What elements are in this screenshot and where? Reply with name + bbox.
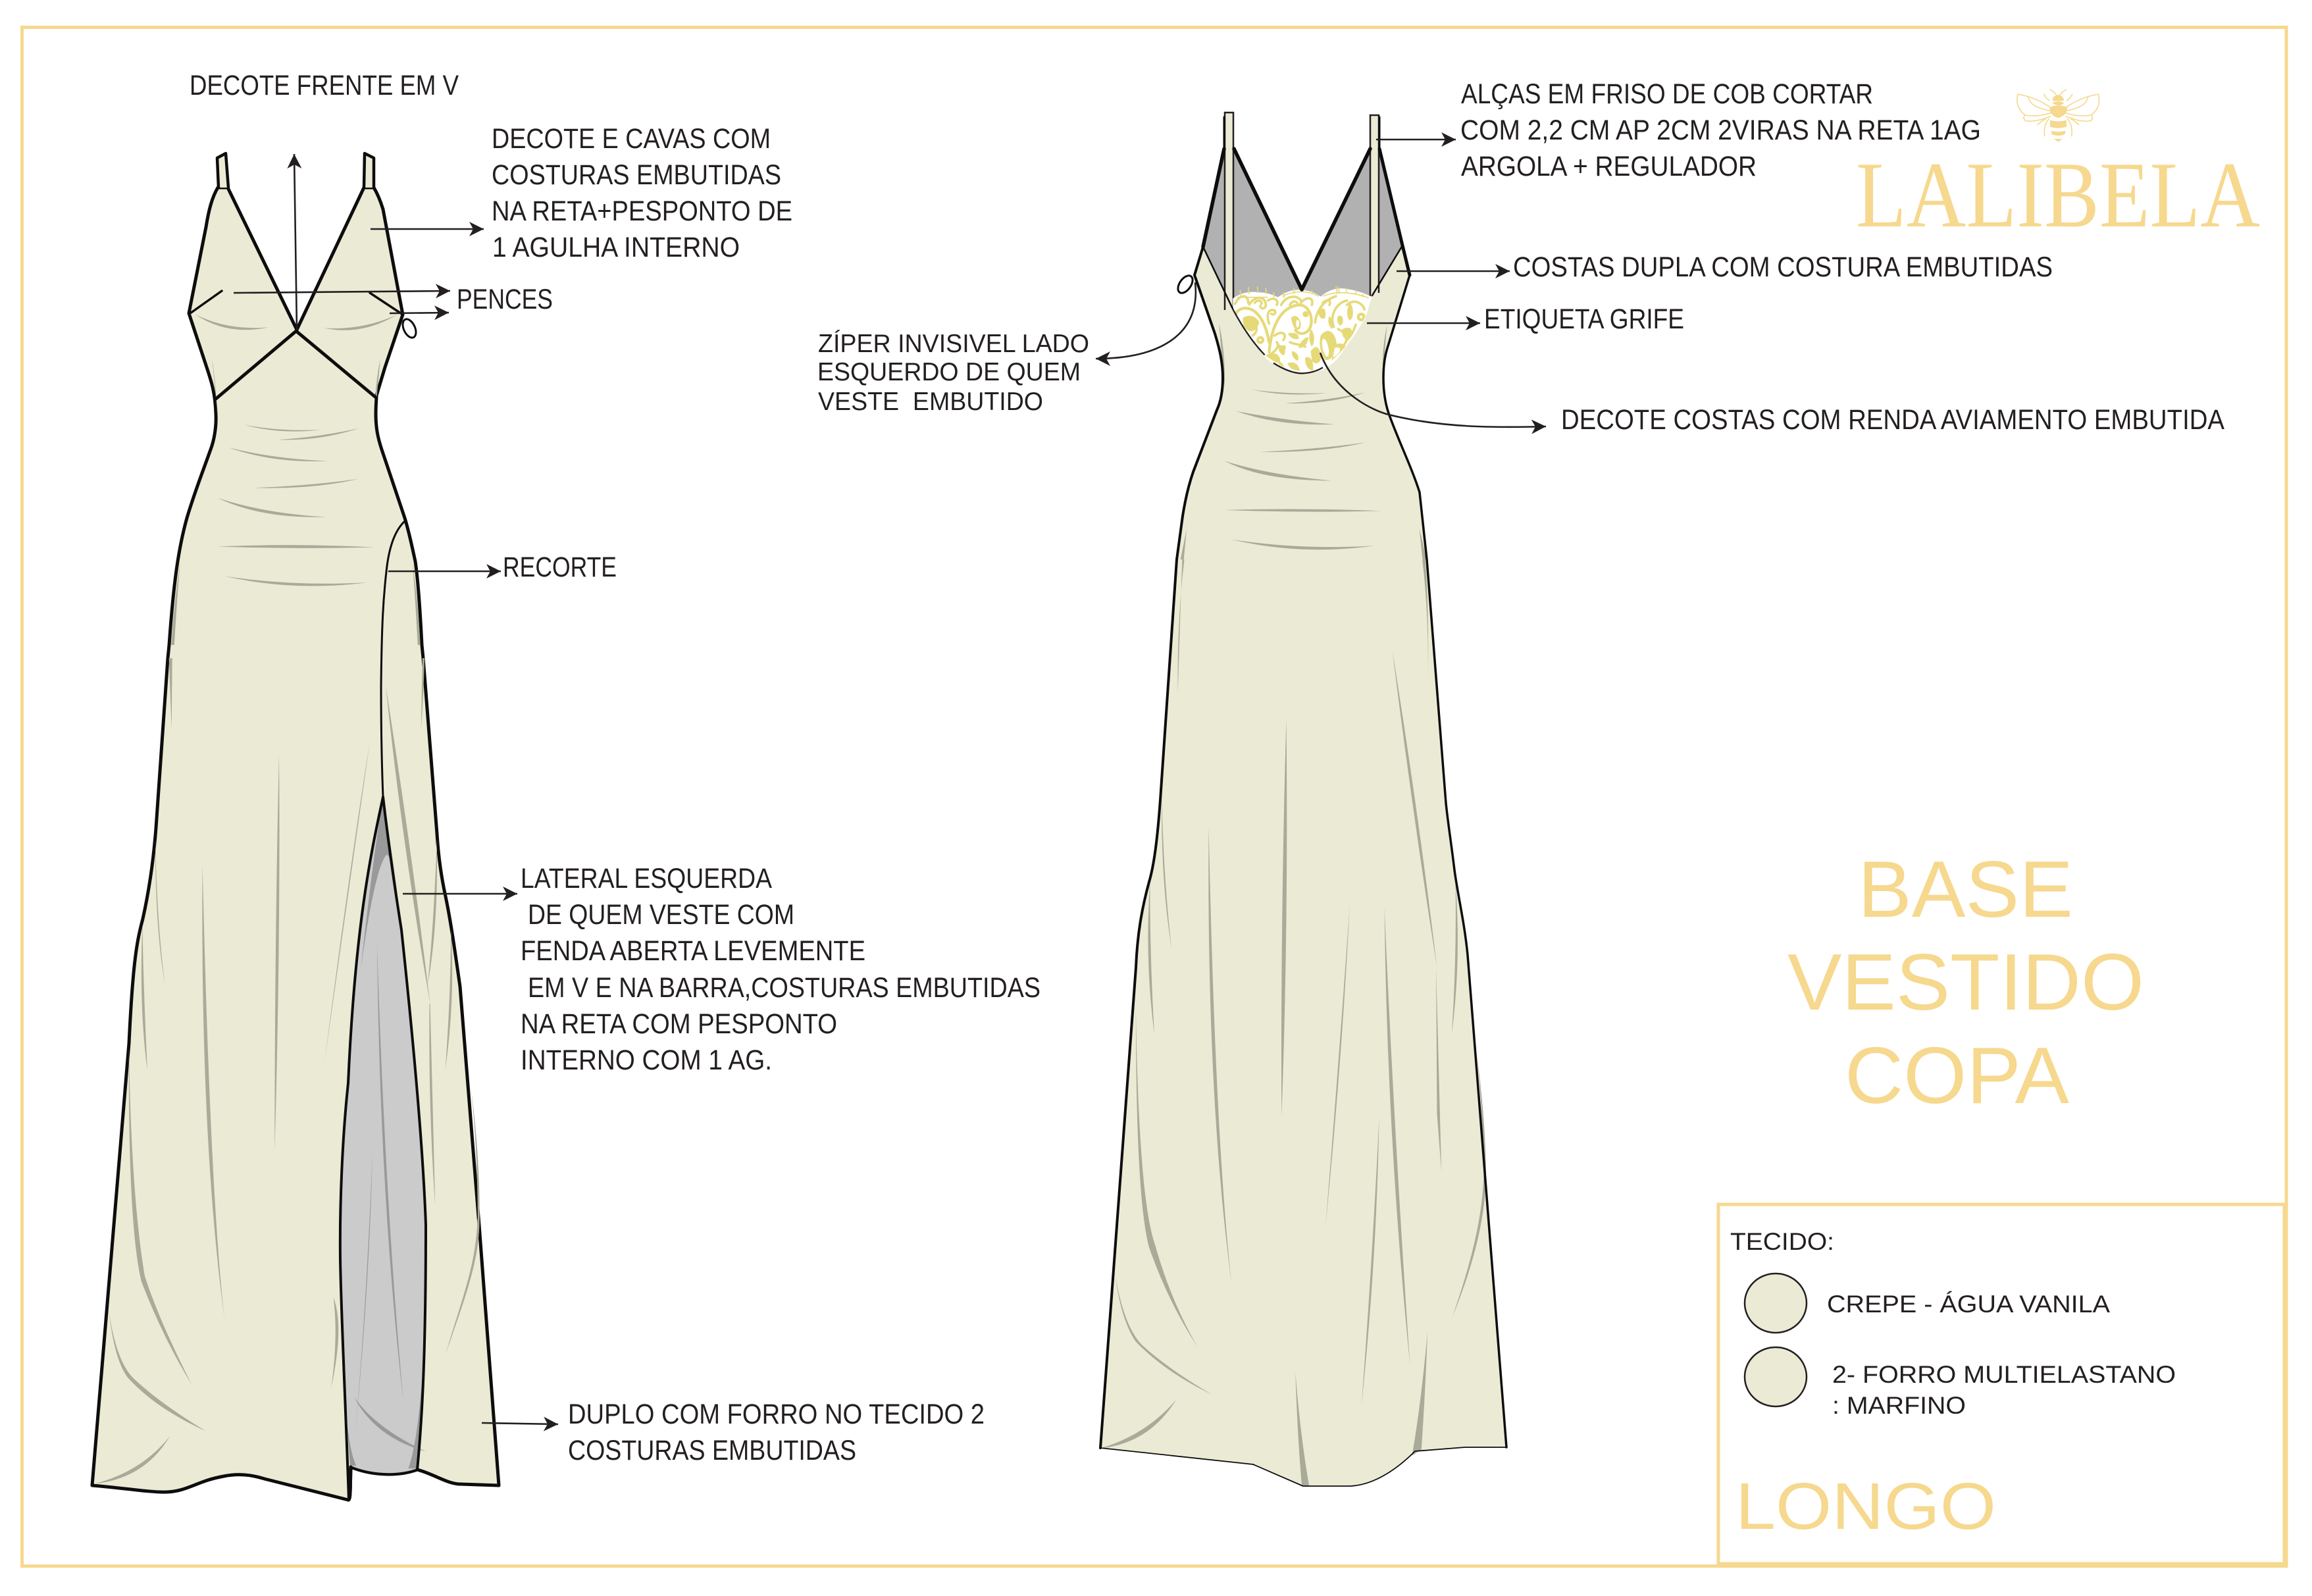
arrow costas [1397, 270, 1510, 272]
annotation: alcas: COM 2,2 CM AP 2CM 2VIRAS NA RETA 1AG [1460, 115, 1981, 146]
folds in slit lining [343, 797, 426, 1468]
arrow cavas [371, 228, 484, 230]
annotation: duplo com forro: DUPLO COM FORRO NO TECIDO 2 [568, 1399, 985, 1430]
panel: tecido [1718, 1204, 2284, 1564]
annotation: recorte: RECORTE [503, 552, 617, 583]
annotation: decote e cavas: COSTURAS EMBUTIDAS [492, 159, 781, 191]
swatch 2 label [1832, 1361, 2176, 1419]
annotation: decote e cavas [492, 123, 792, 263]
annotation: decote frente: DECOTE FRENTE EM V [190, 70, 459, 101]
annotation: duplo com forro: COSTURAS EMBUTIDAS [568, 1435, 856, 1466]
annotation: lateral esquerda: EM V E NA BARRA,COSTURAS EMBUTIDAS [528, 972, 1040, 1004]
arrow decote costas [1320, 353, 1546, 427]
tecido heading: TECIDO: [1730, 1228, 1834, 1255]
lace lower edge [1233, 309, 1323, 373]
arrow duplo [482, 1423, 558, 1424]
title: BASE [1858, 844, 2073, 934]
annotation: decote costas: DECOTE COSTAS COM RENDA AVIAMENTO EMBUTIDA [1561, 404, 2224, 436]
arrow decote [294, 154, 297, 330]
straps back [1225, 113, 1379, 310]
lace background [1233, 288, 1372, 373]
arrows [234, 140, 1546, 1424]
annotation: decote e cavas: DECOTE E CAVAS COM [492, 123, 771, 155]
dress silhouette front [92, 188, 499, 1500]
logo icon: bee [2017, 90, 2099, 142]
arrow pences 1 [234, 291, 450, 293]
annotation: ziper: ESQUERDO DE QUEM [817, 358, 1081, 386]
lace pattern [1233, 296, 1366, 371]
ring back [1175, 273, 1196, 296]
longo label: LONGO [1735, 1470, 1996, 1543]
annotation: lateral esquerda: FENDA ABERTA LEVEMENTE [521, 935, 865, 967]
dress silhouette back [1100, 245, 1506, 1486]
panel border [1718, 1204, 2284, 1564]
logo wordmark: LALIBELA [1856, 143, 2260, 247]
recorte seam [381, 521, 405, 797]
arrow alcas [1376, 139, 1456, 140]
annotation: pences: PENCES [457, 284, 553, 315]
title [1787, 844, 2144, 1120]
annotation: duplo com forro [568, 1399, 985, 1466]
lace fringe [1237, 286, 1369, 298]
annotation: lateral esquerda: LATERAL ESQUERDA [521, 863, 772, 894]
swatch 2 [1745, 1347, 1807, 1406]
folds front upper [171, 314, 421, 645]
arrow ziper [1096, 282, 1196, 359]
title: COPA [1845, 1031, 2070, 1120]
arrow etiqueta [1367, 322, 1480, 324]
lace [1233, 286, 1372, 373]
folds back upper [1181, 323, 1426, 559]
slit lining [340, 797, 426, 1474]
annotation: decote e cavas: NA RETA+PESPONTO DE [492, 195, 792, 227]
front outlines [190, 153, 426, 1500]
lace paisley highlights [1259, 316, 1362, 357]
annotation: costas dupla: COSTAS DUPLA COM COSTURA EMBUTIDAS [1513, 251, 2053, 283]
swatch 2 label: 2- FORRO MULTIELASTANO [1832, 1361, 2176, 1388]
ring front [400, 317, 419, 340]
annotation: ziper: VESTE EMBUTIDO [818, 388, 1043, 416]
annotation: ziper: ZÍPER INVISIVEL LADO [818, 330, 1089, 358]
front view dress [92, 153, 499, 1500]
annotation: lateral esquerda: NA RETA COM PESPONTO [521, 1008, 837, 1040]
pences [190, 291, 403, 315]
swatch 2 label: : MARFINO [1832, 1392, 1966, 1419]
back outlines [1100, 117, 1506, 1486]
annotation: lateral esquerda: INTERNO COM 1 AG. [521, 1044, 772, 1076]
arrow lateral [403, 893, 517, 894]
annotation: alcas: ARGOLA + REGULADOR [1461, 151, 1757, 182]
neckline empire seam [216, 331, 375, 399]
arrow recorte [388, 571, 501, 572]
annotation: alcas [1460, 78, 1981, 182]
annotation: etiqueta: ETIQUETA GRIFE [1484, 303, 1684, 335]
back view dress [1100, 113, 1506, 1486]
annotation: lateral esquerda: DE QUEM VESTE COM [528, 899, 794, 931]
annotation: ziper [817, 330, 1089, 416]
folds back skirt [1100, 559, 1486, 1486]
swatch 1 [1745, 1274, 1807, 1333]
annotation: alcas: ALÇAS EM FRISO DE COB CORTAR [1461, 78, 1873, 110]
straps front [217, 153, 374, 188]
back gray inside [1203, 149, 1402, 309]
annotation: lateral esquerda [521, 863, 1040, 1076]
title: VESTIDO [1787, 937, 2144, 1027]
swatch 1 label: CREPE - ÁGUA VANILA [1827, 1291, 2110, 1318]
annotation: decote e cavas: 1 AGULHA INTERNO [492, 232, 740, 263]
folds front skirt [94, 658, 480, 1483]
lace leaves [1233, 303, 1366, 371]
